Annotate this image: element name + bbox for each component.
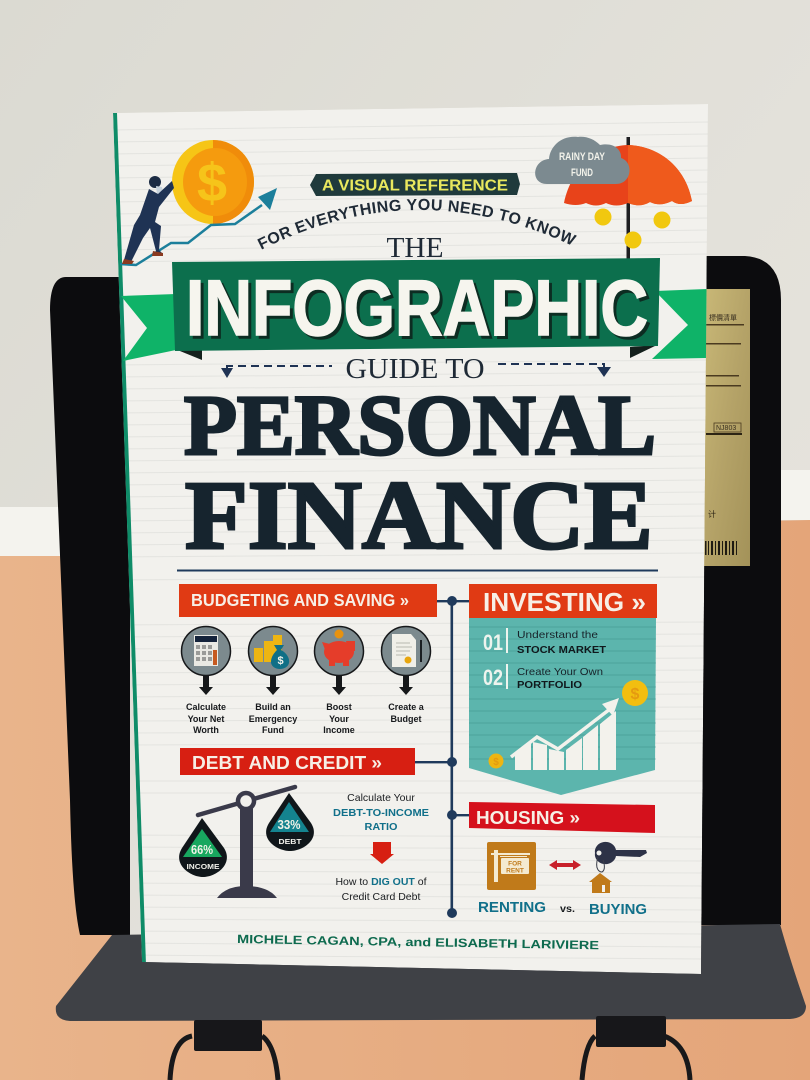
weight: debt 33%: 33% bbox=[278, 817, 301, 832]
banner: housing: HOUSING » bbox=[476, 807, 580, 828]
label: boost your income: Boost bbox=[326, 702, 352, 712]
banner: housing bbox=[469, 802, 655, 833]
item 01: 01 bbox=[483, 630, 503, 655]
green ribbon banner bbox=[121, 258, 708, 361]
text: calculate your debt-to-income ratio bbox=[333, 792, 429, 833]
teal panel bbox=[469, 618, 656, 795]
label: calculate your net worth: Worth bbox=[193, 725, 219, 735]
title: finance: FINANCE bbox=[185, 461, 653, 569]
label: boost your income: Income bbox=[323, 725, 355, 735]
gold price label: 標價清單 bbox=[709, 313, 737, 322]
weight: income 66%: 66% bbox=[191, 842, 213, 857]
section: housing bbox=[469, 802, 655, 918]
badge: a visual reference: A VISUAL REFERENCE bbox=[322, 178, 508, 194]
gold price label: NJ803 bbox=[716, 425, 736, 432]
text: calculate your debt-to-income ratio: RATIO bbox=[364, 821, 398, 833]
guide to with dashed arrows: GUIDE TO bbox=[346, 354, 484, 385]
label: boost your income bbox=[324, 704, 354, 733]
icon: balance scale bbox=[179, 787, 314, 898]
icon: piggy bank bbox=[314, 626, 364, 695]
icon: key with house keychain bbox=[589, 842, 647, 893]
item 02 bbox=[483, 664, 603, 691]
timeline connectors bbox=[177, 570, 658, 918]
title: personal: PERSONAL bbox=[184, 377, 656, 473]
section: budgeting and saving bbox=[179, 584, 437, 735]
icon: gold coin small bbox=[488, 754, 504, 768]
chart: rising bars with arrow bbox=[511, 698, 619, 770]
text: how to dig out of credit card debt: How to DIG OUT of bbox=[335, 876, 427, 888]
icon: gold coin large: $ bbox=[631, 686, 640, 703]
arrow: double-headed red bbox=[549, 860, 581, 870]
icon: man pushing coin up rising arrow bbox=[120, 140, 277, 265]
rainy day fund cloud bbox=[535, 137, 630, 184]
item 01 bbox=[484, 628, 606, 653]
banner: budgeting and saving bbox=[179, 584, 437, 617]
label: build an emergency fund: Fund bbox=[262, 725, 284, 735]
teal spine stripe bbox=[113, 113, 146, 965]
weight: debt 33%: DEBT bbox=[278, 837, 302, 846]
coin bbox=[172, 140, 254, 224]
text: how to dig out of credit card debt: Credit Card Debt bbox=[342, 891, 420, 903]
rainy day fund cloud: FUND bbox=[571, 167, 593, 179]
badge: a visual reference bbox=[310, 173, 520, 196]
banner: investing: INVESTING » bbox=[483, 587, 646, 617]
title: infographic: INFOGRAPHIC bbox=[189, 266, 651, 355]
banner: debt and credit: DEBT AND CREDIT » bbox=[192, 753, 382, 773]
item 02: 02 bbox=[483, 665, 503, 690]
weight: income 66%: INCOME bbox=[186, 862, 220, 871]
label: build an emergency fund bbox=[249, 704, 298, 733]
arrow: red down bbox=[370, 842, 394, 864]
cover paper bbox=[113, 104, 708, 974]
faint ruled paper lines bbox=[113, 122, 708, 959]
label: build an emergency fund: Build an bbox=[255, 702, 291, 712]
book cover bbox=[113, 104, 708, 974]
title: infographic bbox=[190, 279, 650, 340]
label: calculate your net worth bbox=[186, 704, 226, 733]
label: create a budget: Budget bbox=[390, 714, 422, 724]
icon: emergency fund: $ bbox=[277, 655, 284, 667]
title word: the: THE bbox=[386, 232, 444, 264]
label: renting: RENTING bbox=[478, 900, 546, 916]
arched subtitle: FOR EVERYTHING YOU NEED TO KNOW bbox=[257, 198, 577, 250]
icon: for rent sign: RENT bbox=[506, 868, 524, 874]
text: how to dig out of credit card debt bbox=[335, 876, 427, 903]
label: calculate your net worth: Calculate bbox=[186, 702, 226, 712]
icon: calculator bbox=[182, 626, 230, 695]
icon: umbrella, rainy day cloud and coins bbox=[535, 137, 692, 259]
guide to with dashed arrows bbox=[221, 359, 611, 378]
item 02: PORTFOLIO bbox=[517, 679, 582, 691]
icon: budget document bbox=[382, 626, 430, 695]
label: build an emergency fund: Emergency bbox=[249, 714, 297, 724]
icon: for rent sign bbox=[487, 842, 536, 890]
text: calculate your debt-to-income ratio: Calculate Your bbox=[347, 792, 415, 804]
weight: income 66% bbox=[179, 818, 227, 877]
item 01: STOCK MARKET bbox=[517, 644, 607, 656]
book stand: clips and wire legs bbox=[170, 1016, 690, 1080]
icon: for rent sign: FOR bbox=[508, 860, 522, 868]
label: boost your income: Your bbox=[329, 714, 349, 724]
rising arrow bbox=[120, 188, 277, 265]
gold price label bbox=[704, 289, 750, 566]
label: vs.: vs. bbox=[560, 904, 575, 915]
banner: debt and credit bbox=[180, 748, 415, 775]
section: debt and credit bbox=[179, 748, 429, 903]
book stand: grey base bbox=[56, 924, 806, 1021]
text: calculate your debt-to-income ratio: DEBT-TO-INCOME bbox=[333, 807, 429, 819]
rainy day fund cloud: RAINY DAY bbox=[559, 151, 606, 163]
item 01: Understand the bbox=[517, 629, 598, 641]
label: create a budget: Create a bbox=[388, 702, 425, 712]
icon: gold coin small: $ bbox=[493, 757, 499, 768]
banner: budgeting and saving: BUDGETING AND SAVING » bbox=[191, 590, 409, 610]
gold price label: 计 bbox=[708, 509, 716, 519]
label: create a budget bbox=[388, 702, 425, 724]
teal panel ruled lines bbox=[469, 627, 656, 759]
title: infographic: INFOGRAPHIC bbox=[186, 263, 648, 352]
book stand: black backboard bbox=[50, 256, 781, 935]
label: calculate your net worth: Your Net bbox=[188, 714, 224, 724]
businessman bbox=[122, 176, 174, 264]
label: buying: BUYING bbox=[589, 902, 647, 918]
icon: gold coin large bbox=[622, 680, 648, 706]
weight: debt 33% bbox=[266, 793, 314, 851]
item 02: Create Your Own bbox=[517, 666, 603, 678]
coin: $ bbox=[197, 153, 227, 213]
background: baseboard and table bbox=[0, 470, 810, 1080]
icon: emergency fund bbox=[248, 626, 298, 695]
section: investing bbox=[469, 584, 657, 795]
authors: MICHELE CAGAN, CPA, and ELISABETH LARIVIERE bbox=[237, 932, 599, 952]
